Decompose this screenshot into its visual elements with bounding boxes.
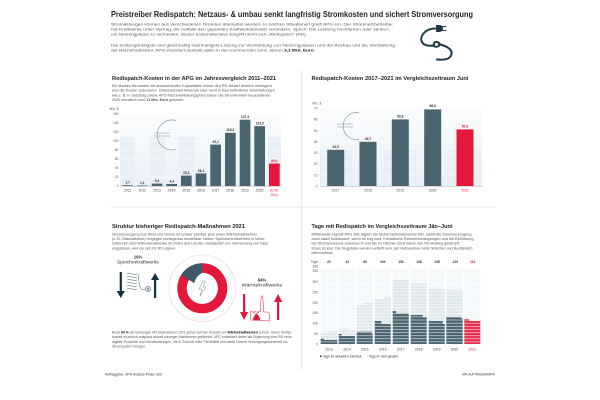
icon: thermal power plant with arrows — [240, 294, 282, 321]
dark bars: days in current period — [321, 311, 480, 344]
legend: Tage im Jahr gesamt — [369, 354, 398, 358]
heading: Redispatch-Kosten 2017–2021 im Vergleichszeitraum Juni — [312, 76, 469, 82]
pale bars: days in whole year — [321, 280, 463, 344]
bar values — [125, 115, 278, 185]
year labels: 2018 — [415, 347, 423, 351]
bar values: 118,3 — [226, 128, 234, 132]
label: thermal power plants: 84% — [258, 278, 266, 282]
description text: Eines ist klar: Die Engpässe werden verteilt sein, der Netzausbau hinkt hinterher und Redispatch — [312, 246, 472, 250]
year labels: 2019 — [397, 188, 404, 192]
summary text — [112, 330, 292, 348]
icon: power plug with cable — [421, 25, 452, 60]
year labels: 2013 — [325, 347, 333, 351]
stacked day chart — [311, 260, 481, 358]
icon: euro sign — [154, 120, 176, 150]
bar values: 50,8 — [462, 124, 468, 128]
bar values: 5,4 — [155, 179, 159, 183]
year labels — [124, 188, 279, 197]
bar values: 59,8 — [397, 114, 404, 118]
icon: storage power plant with arrows — [117, 272, 159, 298]
day totals row: 152 — [398, 260, 404, 264]
heading: Redispatch-Kosten in der APG im Jahresvergleich 2011–2021 — [112, 76, 276, 82]
year labels: 2014 — [168, 188, 176, 192]
day totals row: 22 — [327, 260, 331, 264]
bar values: 133,0 — [256, 122, 264, 126]
day totals row: 113 — [470, 260, 476, 264]
day totals row: 108 — [434, 260, 440, 264]
y axis labels: 350 — [312, 269, 318, 273]
y axis labels: 100 — [312, 322, 318, 326]
label: storage power plants: 16% — [134, 254, 142, 260]
y axis labels: 50 — [314, 332, 318, 336]
year labels: 2020 — [256, 188, 264, 192]
bar chart: yearly costs: 80 — [115, 148, 119, 152]
bar values: 4,4 — [169, 179, 174, 183]
year labels: 2015 — [183, 188, 190, 192]
panel: days with redispatch — [311, 224, 481, 358]
bar chart: yearly costs — [110, 107, 281, 197]
year labels — [332, 188, 469, 192]
bars — [327, 109, 474, 186]
bar chart: comparison period — [313, 102, 482, 192]
y axis labels — [312, 264, 318, 346]
footer: source credit: APA-AUFTRAGSGRAFIK — [462, 372, 496, 376]
footer: client credit: Auftraggeber: APG Austrian Power Grid — [105, 373, 162, 377]
description text: Stromerzeugung aus Wind und Sonne ist schwer planbar, jene eines Wärmekraftwerkes — [112, 232, 257, 236]
bar chart: comparison period: 10 — [314, 173, 318, 177]
description text — [112, 84, 275, 102]
description text: auch stabil funktioniert, wenn es eng wird. Klimatische Rahmenbedingungen und die Einführung — [312, 237, 474, 241]
intro text — [111, 22, 395, 53]
icon: lightning — [199, 281, 206, 296]
bar chart: comparison period: Mio. € — [313, 102, 322, 106]
bar chart: comparison period: 40 — [314, 140, 318, 144]
summary text: barkeit ist jedoch aufgrund aktuell niedriger Marktpreise gefährdet. APG entwickelt daher als Ergänzung zum RD neue — [112, 335, 292, 339]
year labels: 2016 — [379, 347, 387, 351]
panel: Redispatch costs January to June — [312, 76, 482, 192]
bar values: 39,7 — [365, 137, 371, 141]
day totals row: Tage — [311, 260, 318, 264]
bar values: 1,7 — [125, 181, 130, 185]
summary text: digitale Produkte und Dienstleistungen, die in Zukunft mehr Flexibilität und damit höhere Versorgungssicherheit ins — [112, 340, 288, 344]
title: Preistreiber Redispatch: Netzaus- & umbau senkt langfristig Stromkosten und sichert Stromversorgung — [111, 9, 473, 19]
bar values: 23,2 — [183, 171, 190, 175]
year labels: 20.06. — [270, 188, 279, 192]
intro text: Die kostengünstigste und gleichzeitig nachhaltigste Lösung zur Vermeidung von Netzengpässen und der Ausbau und die Verstärkung — [111, 43, 395, 47]
bar values — [332, 104, 468, 149]
intro text: Stromleitungen können aus verschiedenen Gründen überlastet werden. In solchen Situationen greift APG ein. Der Stromnetzbetreiber — [111, 22, 394, 26]
summary text: Stromsystem bringen. — [112, 344, 146, 348]
label: thermal power plants: Wärmekraftwerke — [242, 282, 283, 288]
day totals row — [311, 260, 476, 264]
bar chart: yearly costs: 0 — [117, 184, 119, 188]
year labels: 2019 — [241, 188, 249, 192]
bar values: 68,8 — [429, 104, 436, 108]
year labels: 2018 — [227, 188, 234, 192]
panel: Redispatch costs 2011-2021 — [110, 76, 281, 197]
label: storage power plants — [117, 254, 160, 264]
description text: und die Kosten reduzieren. Österreichweit fehlende oder noch in Bau befindliche Stromleitungen — [112, 89, 275, 93]
bar values: 28,1 — [198, 169, 204, 173]
year labels: 2017 — [332, 188, 340, 192]
day totals row: 42 — [345, 260, 349, 264]
year labels: 2015 — [361, 347, 369, 351]
year labels — [325, 347, 476, 351]
description text: der Strompreiszone zwischen Ö und DE im Oktober 2018 haben den RD-Anstieg gedämpft. — [312, 242, 460, 246]
y axis labels: 250 — [312, 290, 318, 294]
icon: euro sign — [338, 112, 359, 140]
legend: Tage im aktuellen Jahrlauf — [322, 354, 362, 358]
white stripes — [320, 270, 481, 344]
panel: structure of redispatch measures — [112, 224, 292, 348]
year labels: 2020 — [429, 188, 437, 192]
label: thermal power plants — [242, 278, 283, 288]
bar chart: comparison period: 0 — [316, 184, 318, 188]
bar chart: comparison period: 60 — [314, 118, 318, 122]
bar chart: yearly costs: 160 — [113, 112, 119, 116]
label: storage power plants: Speicherkraftwerke — [117, 260, 160, 264]
bar values: 1,1 — [140, 181, 145, 185]
bars — [122, 120, 280, 186]
legend — [320, 354, 398, 358]
year labels: 2021 — [469, 347, 476, 351]
summary text: Rund 84 % der bisherigen RD-Maßnahmen 2021 gehen auf den Einsatz von Wärmekraftwerken zurück. Deren Verfüg- — [112, 330, 292, 334]
year columns — [321, 269, 480, 344]
heading: Tage mit Redispatch im Vergleichszeitraum Jän–Juni — [312, 224, 453, 230]
bar values: 50,0 — [271, 159, 278, 163]
bar chart: yearly costs: 140 — [113, 121, 119, 125]
bar chart: yearly costs: 20 — [115, 175, 119, 179]
bar chart: yearly costs: Mio. € — [110, 107, 119, 111]
bar values: 147,3 — [241, 115, 249, 119]
description text: engpässen, weil sie sich für RD eignen. — [112, 246, 176, 250]
panel dividers — [111, 70, 495, 370]
y axis labels: 200 — [312, 301, 318, 305]
bar chart: yearly costs: 40 — [115, 166, 119, 170]
description text: österreich sind Wärmekraftwerke im Osten des Landes unerlässlich zur Vermeidung von Netz- — [112, 242, 270, 246]
description text: (z. B. Gaskraftwerk) hingegen punktgenau einstellbar. Neben Speicherkraftwerken in West- — [112, 237, 266, 241]
description text: bleibt unerlässlich. — [312, 251, 334, 255]
year labels: 2012 — [139, 188, 146, 192]
day totals row: 104 — [380, 260, 386, 264]
description text — [112, 232, 270, 250]
bar chart: comparison period: 20 — [314, 162, 318, 166]
description text: Ein starkes Stromnetz mit ausreichenden Kapazitäten würde den RD-Bedarf deutlich verringern — [112, 84, 272, 88]
intro text: der Netzinfrastruktur. APG investiert deshalb allein in den kommenden zehn Jahren 3,1 Mrd. Euro . — [111, 49, 315, 53]
description text: 2020 monatlich rund 11 Mio. Euro gekostet. — [112, 98, 184, 102]
year labels: 2014 — [343, 347, 351, 351]
year labels: 2020 — [451, 347, 458, 351]
intro text: um Netzengpässe zu vermeiden. Dieser kostenintensive Eingriff nennt sich „Redispatch“ (RD). — [111, 33, 307, 37]
donut chart: share of measures — [169, 255, 236, 322]
year labels: 2018 — [364, 188, 372, 192]
year labels: 2016 — [197, 188, 205, 192]
bar chart: yearly costs: 100 — [113, 139, 119, 143]
bar values: 92,1 — [212, 140, 219, 144]
year labels: 2021 — [461, 188, 469, 192]
day totals row: 138 — [416, 260, 422, 264]
intro text: hat Kraftwerke unter Vertrag, die notfalls den geplanten Kraftwerkseinsatz verändern. Sprich: Die Leistung hochfahren oder senken, — [111, 28, 390, 32]
bar chart: comparison period: 70 — [314, 106, 318, 110]
description text: Mittlerweile ergreift APG fast täglich die Sicherheitsmaßnahme RD, damit die Stromversorgung — [312, 232, 472, 236]
heading: Struktur bisheriger Redispatch-Maßnahmen 2021 — [112, 224, 245, 230]
bar chart: comparison period: 50 — [314, 129, 318, 133]
day totals row: 59 — [363, 260, 367, 264]
bar values: 32,5 — [332, 145, 339, 149]
bar chart: yearly costs: 60 — [115, 157, 119, 161]
year labels: 2019 — [433, 347, 441, 351]
description text: wie z. B. in Salzburg (siehe APG-Netzentwicklungsplan) haben die Stromkunden heuer/alleine — [112, 93, 270, 97]
y axis labels: 150 — [312, 311, 318, 315]
bar chart: comparison period: 30 — [314, 151, 318, 155]
description text — [312, 232, 474, 255]
year labels: 2011 — [124, 188, 131, 192]
year labels: 2013 — [153, 188, 161, 192]
day totals row: 129 — [453, 260, 458, 264]
y axis labels: 0 — [316, 342, 318, 346]
bar chart: yearly costs: 120 — [113, 130, 119, 134]
y axis labels: 365 — [312, 264, 318, 268]
year labels: 2017 — [397, 347, 405, 351]
year labels: 2021 — [271, 193, 278, 197]
y axis labels: 300 — [312, 280, 318, 284]
year labels: 2017 — [212, 188, 220, 192]
